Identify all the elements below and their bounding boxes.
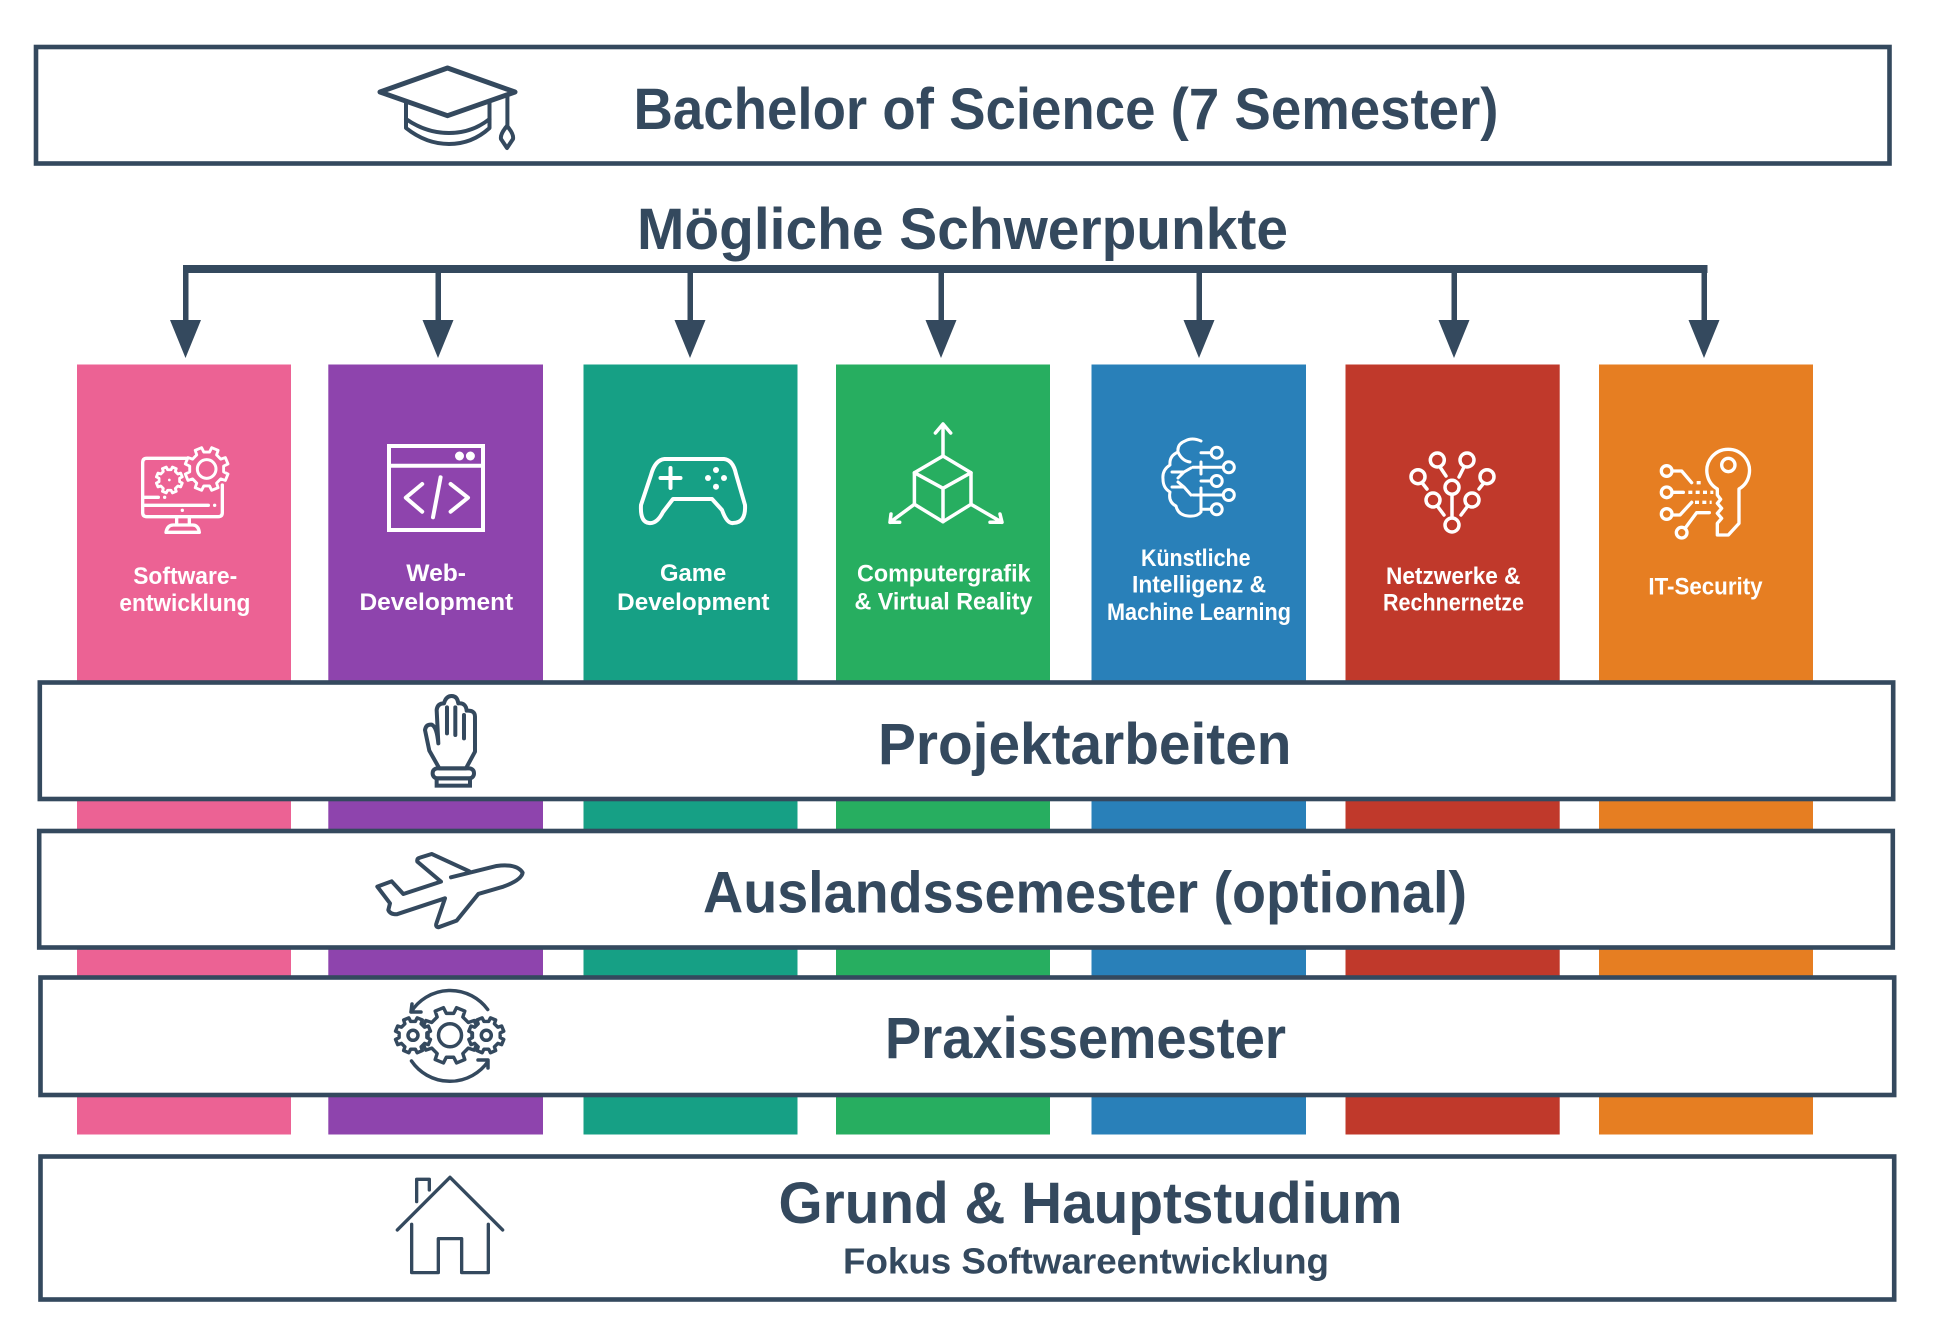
- label: Game Development: Game: [660, 560, 726, 587]
- panel: Netzwerke column: [1346, 364, 1560, 1134]
- label: Künstliche Intelligenz & Machine Learning: Machine Learning: [1107, 599, 1291, 626]
- icon: cycling gears: [396, 991, 504, 1081]
- label: Netzwerke & Rechnernetze: Rechnernetze: [1383, 590, 1524, 617]
- icon: monitor with gears: [143, 448, 228, 532]
- panel: Web-Development column: [328, 364, 543, 1134]
- label: Softwareentwicklung: Software-: [133, 563, 237, 590]
- icon: airplane: [377, 854, 523, 927]
- label: Game Development: [617, 560, 770, 616]
- panel: Grund- und Hauptstudium: [40, 1156, 1894, 1300]
- label: Netzwerke & Rechnernetze: [1383, 563, 1524, 617]
- panel: Softwareentwicklung column: [77, 364, 291, 1134]
- label: Web-Development: [360, 560, 513, 616]
- label: Game Development: Development: [617, 589, 770, 616]
- panel: Projektarbeiten: [40, 682, 1893, 799]
- icon: raised hand: [425, 696, 475, 786]
- label: Netzwerke & Rechnernetze: Netzwerke &: [1386, 563, 1520, 590]
- text: Projektarbeiten: Projektarbeiten: [878, 712, 1292, 777]
- label: IT-Security: IT-Security: [1648, 574, 1763, 600]
- icon: brain circuit: [1163, 439, 1234, 516]
- icon: cube with arrows: [890, 424, 1002, 522]
- heading: possible focus areas: Mögliche Schwerpunkte: [637, 197, 1288, 262]
- panel: degree header: [36, 47, 1890, 164]
- icon: game controller: [641, 459, 745, 523]
- label: Web-Development: Development: [360, 589, 513, 616]
- label: Softwareentwicklung: [119, 563, 250, 617]
- icon: browser window with code: [389, 446, 483, 530]
- panel: Computergrafik column: [836, 364, 1050, 1134]
- text: Grund & Hauptstudium: Grund & Hauptstudium: [778, 1171, 1402, 1236]
- text: Praxissemester: Praxissemester: [885, 1006, 1286, 1071]
- panel: Auslandssemester: [39, 831, 1893, 948]
- icon: house: [397, 1177, 503, 1273]
- panel: IT-Security column: [1599, 364, 1813, 1134]
- label: Softwareentwicklung: entwicklung: [119, 590, 250, 617]
- label: Computergrafik & Virtual Reality: [854, 561, 1033, 616]
- icon: key with circuits: [1661, 449, 1749, 538]
- panel: Praxissemester: [40, 978, 1894, 1095]
- icon: graduation cap: [380, 68, 515, 148]
- title: degree: Bachelor of Science (7 Semester): [634, 77, 1498, 142]
- label: Computergrafik & Virtual Reality: & Virtual Reality: [854, 589, 1033, 616]
- text: Fokus Softwareentwicklung: Fokus Softwareentwicklung: [843, 1240, 1329, 1281]
- label: Computergrafik & Virtual Reality: Computergrafik: [857, 561, 1031, 588]
- label: Web-Development: Web-: [406, 560, 466, 587]
- label: Künstliche Intelligenz & Machine Learning: Intelligenz &: [1132, 572, 1266, 599]
- label: Künstliche Intelligenz & Machine Learning: Künstliche: [1141, 545, 1250, 572]
- panel: Game Development column: [584, 364, 798, 1134]
- arrows: from heading to focus columns: [170, 265, 1720, 358]
- text: Auslandssemester: Auslandssemester (optional): [703, 861, 1467, 926]
- panel: KI column: [1092, 364, 1306, 1134]
- icon: network nodes: [1411, 453, 1494, 532]
- label: Künstliche Intelligenz & Machine Learning: [1107, 545, 1291, 626]
